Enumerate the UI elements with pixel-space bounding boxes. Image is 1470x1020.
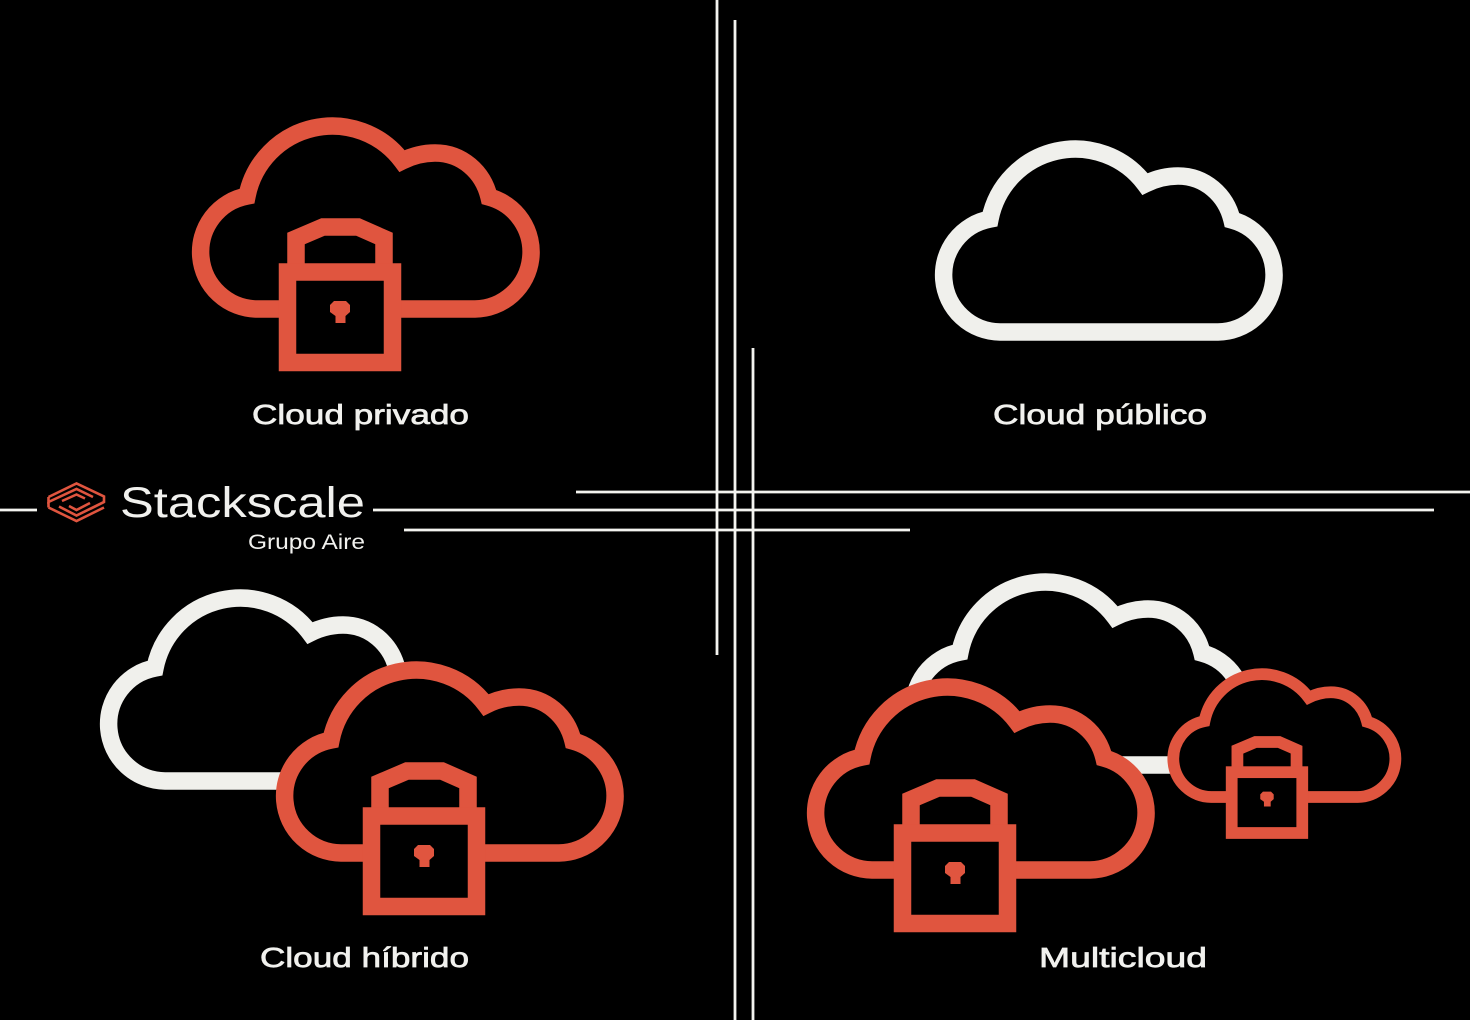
panel: cloud publico icon (944, 149, 1274, 332)
panel: cloud privado icon (201, 126, 531, 362)
icon: stacked layers logo mark (48, 484, 104, 521)
logo: Stackscale Grupo Aire (48, 479, 365, 554)
label: Multicloud: Multicloud (1039, 942, 1207, 973)
panel: multicloud icons (816, 582, 1395, 924)
panel: cloud hibrido icons (109, 598, 615, 906)
logo: Stackscale Grupo Aire: Grupo Aire (248, 531, 365, 554)
label: Cloud privado: Cloud privado (252, 399, 469, 430)
icon: public cloud behind (914, 582, 1244, 765)
icon: small private cloud (1173, 674, 1395, 833)
logo: Stackscale Grupo Aire: Stackscale (120, 479, 365, 527)
icon: large private cloud (816, 687, 1146, 924)
label: Cloud publico: Cloud público (993, 399, 1207, 430)
icon: private cloud in front (285, 670, 615, 906)
label: Cloud hibrido: Cloud híbrido (260, 942, 469, 973)
icon: public cloud behind (109, 598, 439, 781)
